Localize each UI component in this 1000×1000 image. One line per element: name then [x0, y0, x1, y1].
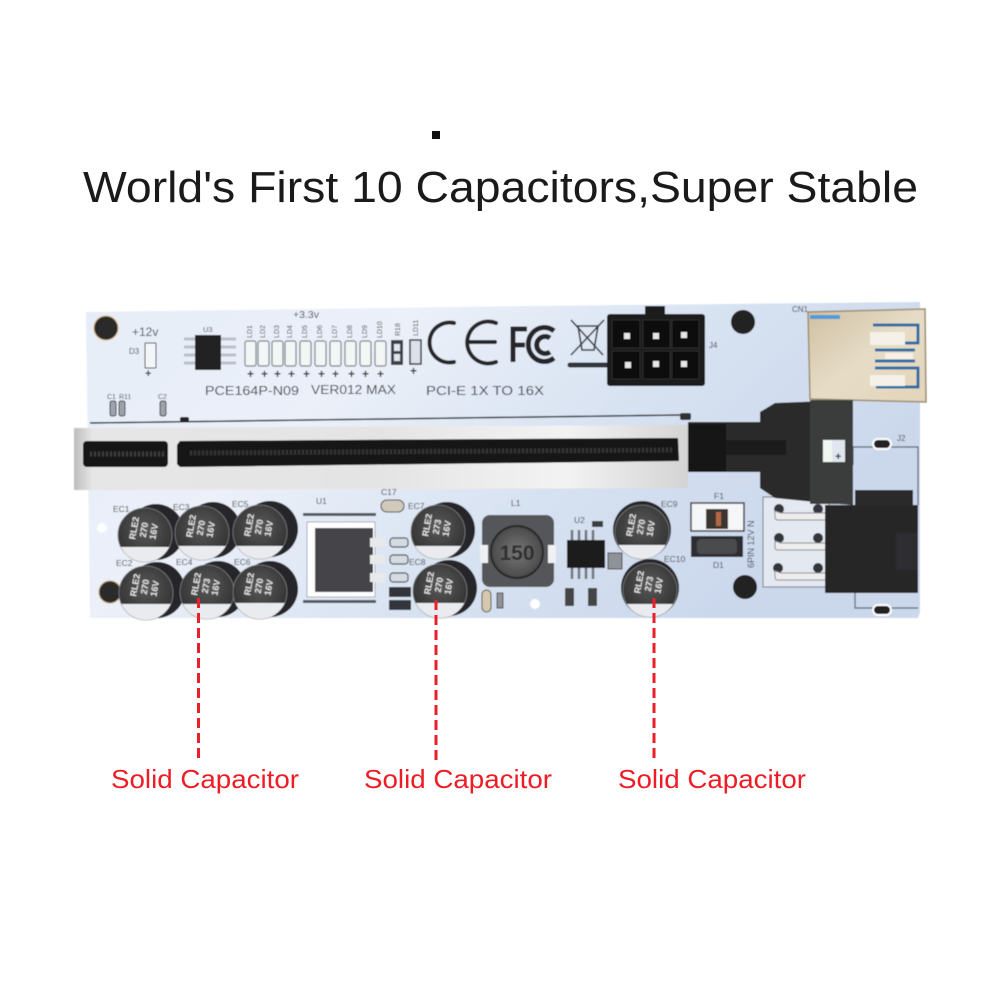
capacitor markings: 270	[139, 579, 151, 595]
LED row: LD11	[413, 320, 420, 336]
lower left silkscreen labels: EC8	[409, 557, 426, 567]
LED row: LD10	[377, 321, 384, 338]
capacitor markings: 273	[643, 576, 655, 592]
regulator U1	[303, 500, 411, 610]
lower left silkscreen labels: F1	[714, 491, 724, 501]
capacitor markings: 16V	[210, 579, 222, 596]
icon: crossed-out bin	[570, 320, 608, 365]
callout: right group leader and label: Solid Capacitor	[618, 764, 806, 794]
title: World's First 10 Capacitors,Super Stable	[83, 163, 918, 212]
lower left silkscreen labels	[113, 487, 724, 570]
capacitor markings: 16V	[205, 521, 217, 538]
small capacitors C1 R11 C2	[110, 401, 166, 416]
capacitor markings: 16V	[149, 580, 161, 597]
6PIN 12V label: 6PIN 12V N	[746, 520, 756, 568]
lower left silkscreen labels: D1	[713, 560, 724, 570]
PCIe slot bar	[74, 413, 691, 490]
lower left silkscreen labels: EC6	[234, 557, 251, 567]
upper left silkscreen labels: VER012 MAX	[311, 382, 396, 397]
lower left silkscreen labels: EC1	[113, 504, 130, 514]
capacitor markings: RLE2	[624, 513, 638, 537]
lower left silkscreen labels: EC2	[116, 558, 133, 568]
LED row: LD1	[247, 325, 254, 338]
LED row: +	[288, 367, 295, 381]
lower left silkscreen labels: EC4	[176, 557, 193, 567]
lower left silkscreen labels: EC5	[232, 499, 249, 509]
LED row: +	[348, 367, 355, 381]
icon: CE mark	[430, 322, 496, 364]
LED row: LD7	[332, 325, 339, 338]
label J2: J2	[897, 434, 906, 443]
upper left silkscreen labels: +12v	[132, 325, 158, 339]
LED row: +	[261, 367, 268, 381]
label J4: J4	[709, 341, 718, 350]
LED row: +	[318, 367, 325, 381]
upper left silkscreen labels: D3	[129, 347, 140, 356]
inductor L1: 150	[499, 542, 535, 565]
callout: left group leader and label: Solid Capacitor	[111, 764, 299, 794]
LED D3	[145, 343, 156, 368]
small parts around inductor	[482, 588, 597, 612]
capacitor markings: RLE2	[127, 516, 141, 540]
chip U2	[567, 521, 622, 579]
upper left silkscreen labels: C2	[158, 394, 167, 401]
black riser latch connector	[688, 400, 853, 505]
LED row	[245, 320, 421, 381]
polarity stripes	[110, 545, 685, 624]
diode D1	[691, 536, 743, 557]
LED row: +	[332, 367, 339, 381]
panel: riser board photo	[74, 302, 926, 624]
capacitor markings: 16V	[441, 520, 453, 537]
LED row: +	[274, 367, 281, 381]
capacitor markings: 16V	[645, 520, 657, 537]
capacitor markings: 16V	[148, 523, 160, 540]
USB 3.0 port: CN1	[792, 305, 809, 314]
LED row: +	[410, 364, 417, 378]
LED row: +	[362, 367, 369, 381]
capacitor markings	[127, 513, 666, 601]
right angle power pins	[763, 497, 829, 587]
LED row: +	[303, 367, 310, 381]
capacitor markings: 270	[433, 577, 445, 593]
capacitor tops	[118, 505, 677, 620]
LED plus mark: +	[145, 368, 151, 380]
circuit board base	[86, 302, 920, 618]
capacitor markings: 270	[195, 520, 207, 536]
capacitor markings: RLE2	[242, 572, 256, 596]
capacitor markings: RLE2	[184, 514, 198, 538]
upper left silkscreen labels	[107, 309, 544, 401]
mounting holes	[94, 310, 918, 615]
lower left silkscreen labels: EC10	[664, 554, 686, 564]
LED row: LD9	[362, 325, 369, 338]
capacitor bodies	[128, 501, 679, 618]
decorative dot above title	[432, 131, 440, 139]
LED row: LD4	[287, 325, 294, 338]
capacitor markings: 16V	[443, 578, 455, 595]
upper left silkscreen labels: C1	[107, 394, 116, 401]
capacitor markings: 270	[138, 522, 150, 538]
callout: middle group leader and label: Solid Capacitor	[364, 764, 552, 794]
LED row: LD8	[347, 325, 354, 338]
capacitors	[110, 501, 685, 624]
upper left silkscreen labels: R11	[119, 394, 131, 401]
lower left silkscreen labels: C17	[381, 487, 397, 497]
upper left silkscreen labels: PCE164P-N09	[205, 383, 299, 398]
capacitor markings: RLE2	[128, 573, 142, 597]
6-pin power connector J4	[607, 306, 705, 386]
inductor L1	[480, 515, 556, 587]
capacitor markings: 270	[253, 519, 265, 535]
LED row: LD5	[302, 325, 309, 338]
chip U3	[184, 335, 236, 370]
upper left silkscreen labels: PCI-E 1X TO 16X	[426, 383, 544, 398]
capacitor markings: 16V	[263, 579, 275, 596]
capacitor markings: RLE2	[420, 513, 434, 537]
capacitor markings: 270	[253, 578, 265, 594]
black riser latch connector: +	[835, 451, 841, 463]
LED row: LD2	[260, 325, 267, 338]
lower left silkscreen labels: EC3	[173, 502, 190, 512]
lower left silkscreen labels: L1	[511, 498, 521, 508]
capacitor markings: RLE2	[422, 571, 436, 595]
LED row: LD6	[317, 325, 324, 338]
icon: FCC mark	[513, 328, 554, 362]
lower left silkscreen labels: EC7	[408, 501, 425, 511]
capacitor markings: 16V	[263, 520, 275, 537]
lower left silkscreen labels: U2	[574, 515, 585, 525]
capacitor markings: RLE2	[189, 572, 203, 596]
LED row: +	[377, 367, 384, 381]
fuse F1	[691, 503, 744, 531]
capacitor markings: RLE2	[632, 570, 646, 594]
capacitor markings: 273	[200, 578, 212, 594]
upper left silkscreen labels: U3	[203, 325, 213, 334]
LED row: LD3	[274, 325, 281, 338]
black power connector	[825, 490, 918, 593]
capacitor markings: 16V	[653, 577, 665, 594]
capacitor markings: RLE2	[242, 513, 256, 537]
capacitor markings: 273	[431, 519, 443, 535]
lower left silkscreen labels: U1	[316, 496, 327, 506]
capacitor markings: 270	[635, 519, 647, 535]
upper left silkscreen labels: +3.3v	[293, 309, 320, 321]
LED row: R18	[395, 323, 402, 336]
USB 3.0 port	[792, 305, 926, 402]
lower left silkscreen labels: EC9	[661, 499, 678, 509]
LED row: +	[247, 367, 254, 381]
